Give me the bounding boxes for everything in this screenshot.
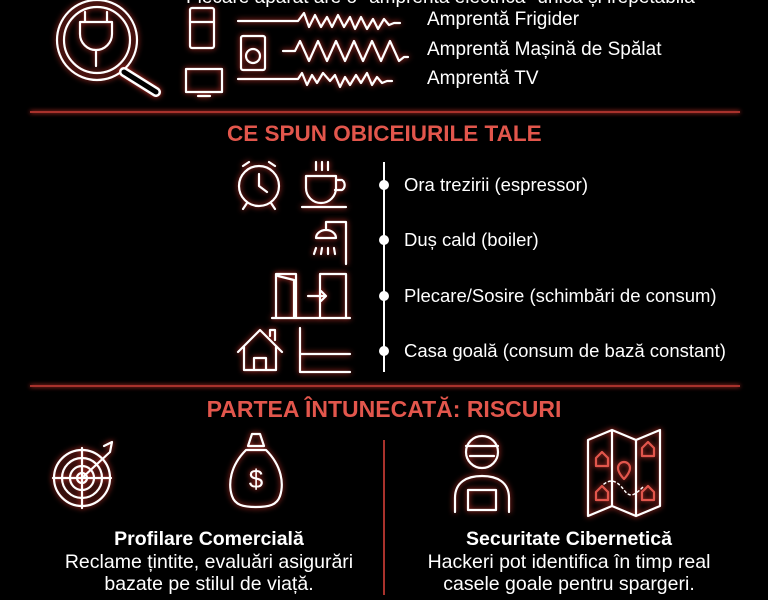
icon: magnifier with plug	[57, 0, 156, 92]
icon: money bag: $	[249, 464, 264, 494]
icon: baseline graph	[300, 328, 350, 372]
risk: commercial: Profilare Comercială	[114, 528, 304, 550]
risk: commercial	[65, 528, 353, 595]
icon: doors	[272, 274, 350, 318]
heading: habits: CE SPUN OBICEIURILE TALE	[227, 121, 542, 146]
icon: target	[53, 442, 112, 508]
habit labels: Ora trezirii (espressor)	[404, 174, 588, 195]
text: Casa goală (consum de bază constant)	[404, 340, 726, 361]
risk: cyber	[428, 528, 710, 595]
icon: tv	[186, 69, 222, 96]
wave: fridge	[238, 13, 400, 29]
icon: money bag	[230, 434, 282, 507]
icon: map	[588, 430, 660, 516]
risk: commercial: bazate pe stilul de viață.	[104, 573, 314, 595]
risk: cyber: Hackeri pot identifica în timp real	[428, 550, 710, 572]
labels: Amprentă Frigider	[427, 9, 579, 30]
text: Duș cald (boiler)	[404, 229, 539, 250]
icon: shower	[314, 222, 346, 264]
text: Plecare/Sosire (schimbări de consum)	[404, 285, 717, 306]
text: Amprentă TV	[427, 68, 539, 89]
risk: commercial: Reclame țintite, evaluări asigurări	[65, 550, 353, 572]
text: Amprentă Mașină de Spălat	[427, 39, 661, 60]
risk: cyber: Securitate Cibernetică	[466, 528, 672, 550]
risk: cyber: casele goale pentru spargeri.	[443, 573, 695, 595]
wave: tv	[238, 73, 392, 87]
icon: house	[238, 330, 282, 370]
heading: risks: PARTEA ÎNTUNECATĂ: RISCURI	[207, 396, 561, 422]
icon: fridge	[190, 8, 214, 48]
icon: coffee cup	[302, 162, 346, 207]
wave: washer	[283, 41, 408, 61]
timeline	[379, 162, 389, 372]
icon: hacker	[455, 436, 509, 512]
icon: washing machine	[241, 36, 265, 70]
icon: alarm clock	[239, 162, 279, 209]
